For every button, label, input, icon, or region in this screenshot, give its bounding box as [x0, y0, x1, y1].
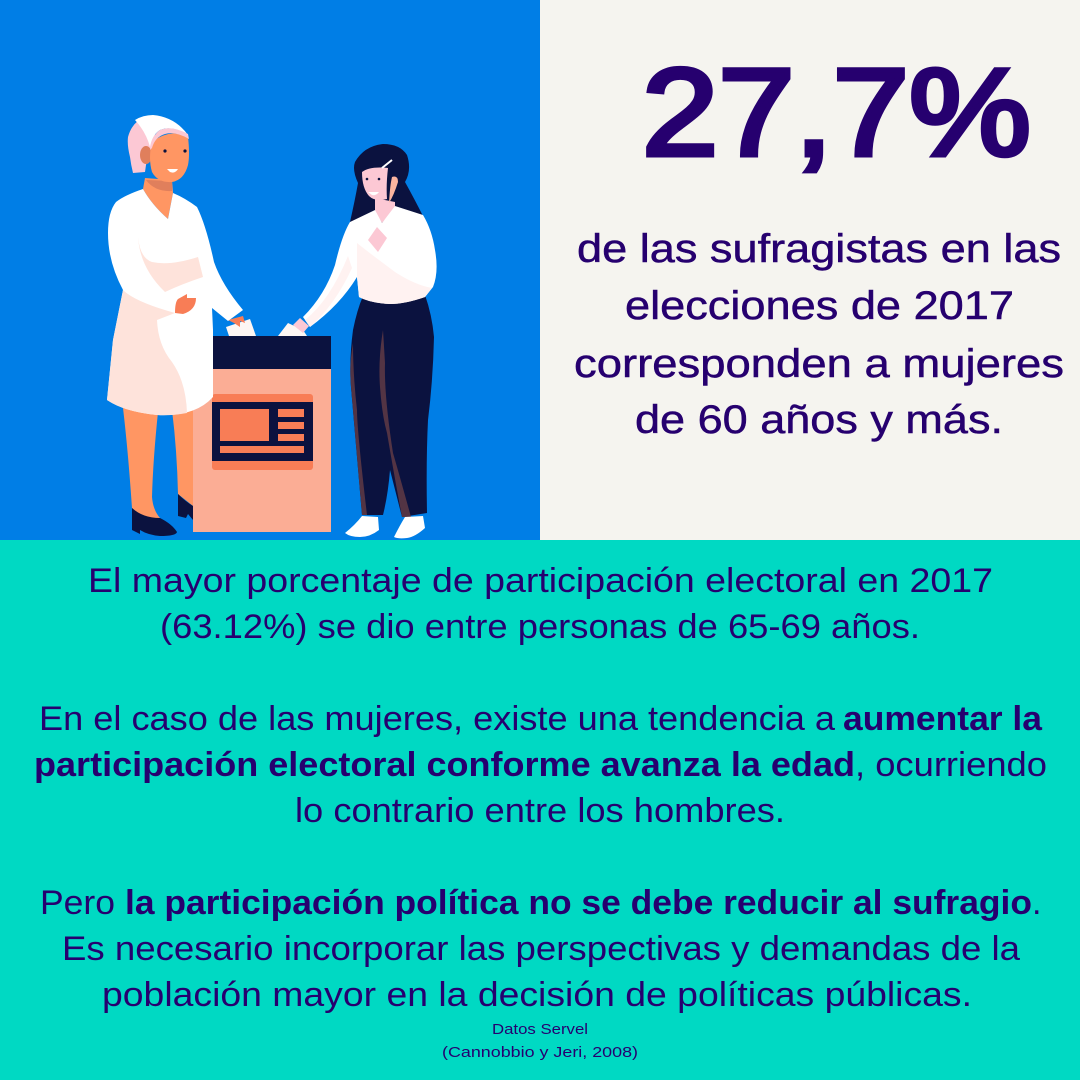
- text block: political participation: población mayor en la decisión de políticas públicas.: [102, 976, 972, 1014]
- big statistic: 27,7%: [642, 44, 1031, 182]
- statistic description: de 60 años y más.: [635, 398, 1003, 442]
- statistic description: corresponden a mujeres: [574, 342, 1064, 386]
- panel: illustration background: [0, 0, 540, 540]
- icon: younger woman: [278, 144, 437, 538]
- source note: (Cannobbio y Jeri, 2008): [442, 1044, 638, 1061]
- text block: political participation: Es necesario incorporar las perspectivas y demandas de la: [62, 930, 1020, 968]
- panel: statistic background: [540, 0, 1080, 540]
- text block: women's trend: [34, 700, 1047, 830]
- text block: participation peak: (63.12%) se dio entre personas de 65-69 años.: [160, 608, 920, 646]
- statistic description: [574, 227, 1064, 442]
- text block: women's trend: aumentar la: [843, 700, 1043, 738]
- source note: Datos Servel: [492, 1021, 588, 1038]
- text block: women's trend: lo contrario entre los hombres.: [295, 792, 785, 830]
- source note: [442, 1021, 638, 1061]
- statistic description: de las sufragistas en las: [577, 227, 1061, 271]
- text block: political participation: [40, 884, 1041, 1014]
- text block: women's trend: , ocurriendo: [855, 746, 1047, 784]
- text block: political participation: Pero: [40, 884, 115, 922]
- icon: older woman: [107, 115, 256, 536]
- text block: women's trend: En el caso de las mujeres, existe una tendencia a: [39, 700, 835, 738]
- text block: political participation: .: [1032, 884, 1041, 922]
- text block: women's trend: participación electoral conforme avanza la edad: [34, 746, 855, 784]
- panel: text background: [0, 540, 1080, 1080]
- icon: ballot box: [193, 336, 331, 532]
- statistic description: elecciones de 2017: [625, 284, 1014, 328]
- illustration: two women voting: [107, 115, 437, 538]
- text block: political participation: la participación política no se debe reducir al sufragio: [125, 884, 1032, 922]
- text block: participation peak: El mayor porcentaje de participación electoral en 2017: [88, 562, 993, 600]
- text block: participation peak: [88, 562, 993, 646]
